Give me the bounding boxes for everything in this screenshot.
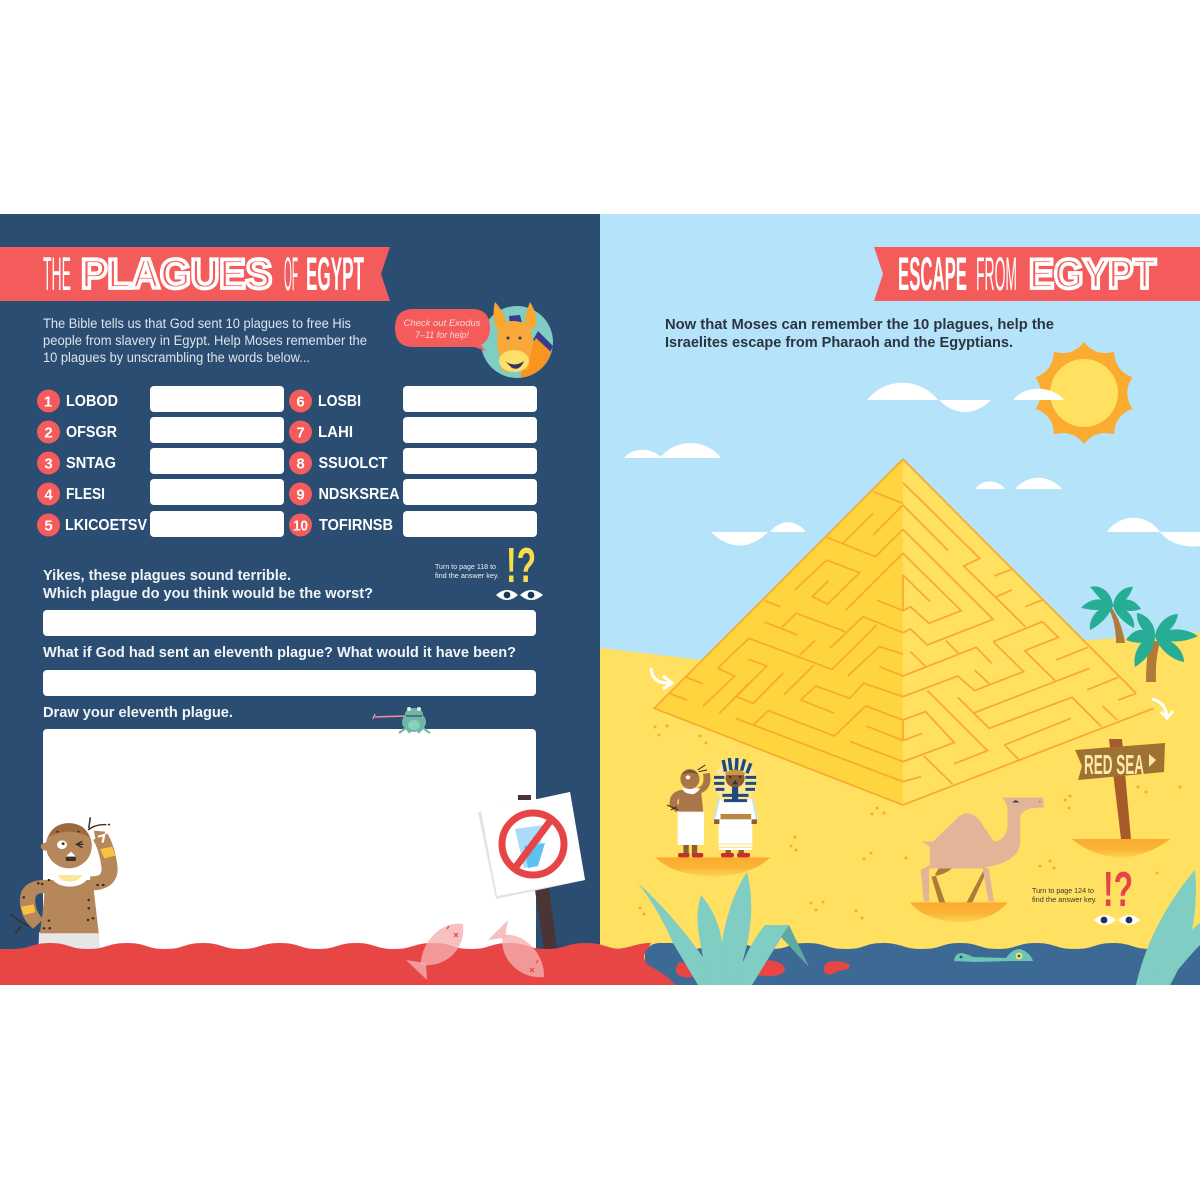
- answer key note with eyes: [1032, 863, 1140, 925]
- word scramble rows: SNTAG: [66, 455, 116, 472]
- blood red river: [0, 943, 624, 985]
- panel: escape from Egypt maze: [600, 247, 1200, 985]
- intro text: 10 plagues by unscrambling the words below...: [43, 350, 310, 365]
- word scramble rows: LAHI: [318, 424, 353, 441]
- clouds: [624, 383, 1200, 546]
- intro text: people from slavery in Egypt. Help Moses remember the: [43, 333, 367, 348]
- word scramble rows: 2: [44, 424, 53, 442]
- question: eleventh plague: [43, 644, 536, 696]
- question: eleventh plague: What if God had sent an eleventh plague? What would it have been?: [43, 644, 516, 661]
- word scramble rows: SSUOLCT: [318, 455, 388, 472]
- answer key note with eyes: !?: [1103, 863, 1133, 917]
- blood water blobs: [600, 943, 850, 985]
- Red Sea water: [645, 943, 1200, 985]
- illustration: man and pharaoh: [655, 757, 770, 877]
- word scramble rows: 9: [296, 486, 305, 504]
- drawing prompt: Draw your eleventh plague.: [43, 704, 233, 721]
- title banner: the plagues of Egypt: THE: [43, 247, 71, 300]
- callout: check out Exodus: Check out Exodus: [404, 318, 481, 329]
- illustration: camel: [910, 798, 1044, 923]
- word scramble rows: 4: [44, 486, 53, 504]
- icon: frog with tongue: [373, 707, 430, 733]
- title banner: escape from Egypt: EGYPT: [1029, 250, 1156, 297]
- arrow: maze exit: [1152, 699, 1173, 718]
- title banner: the plagues of Egypt: PLAGUES: [81, 250, 272, 297]
- sign: no drinking water: [478, 792, 585, 950]
- word scramble rows: 5: [44, 518, 53, 534]
- intro text: Israelites escape from Pharaoh and the Egyptians.: [665, 334, 1013, 351]
- title banner: the plagues of Egypt: EGYPT: [306, 247, 364, 300]
- fish: dead fish two: [488, 920, 544, 977]
- intro text: The Bible tells us that God sent 10 plagues to free His: [43, 316, 351, 331]
- fish: dead fish one: [406, 924, 463, 980]
- word scramble rows: 1: [44, 394, 52, 410]
- intro text: Now that Moses can remember the 10 plagues, help the: [665, 316, 1054, 333]
- question: worst plague: [43, 567, 536, 636]
- title banner: the plagues of Egypt: [0, 247, 390, 301]
- question: worst plague: Yikes, these plagues sound terrible.: [43, 567, 291, 584]
- plant: right agave: [1136, 870, 1200, 985]
- intro text: [43, 316, 367, 365]
- signpost: Red Sea: [1072, 739, 1170, 858]
- panel: left page background: [0, 214, 600, 985]
- palm trees: [1081, 586, 1198, 682]
- answer key note with eyes: find the answer key.: [1032, 897, 1097, 904]
- illustration: man with boils: [10, 817, 116, 952]
- callout: check out Exodus: 7–11 for help!: [415, 330, 469, 341]
- word scramble rows: LOBOD: [66, 393, 118, 410]
- word scramble rows: LKICOETSV: [65, 517, 148, 534]
- arrow: maze start: [651, 668, 672, 689]
- drawing box: [43, 729, 536, 954]
- title banner: escape from Egypt: ESCAPE: [898, 247, 967, 300]
- word scramble rows: TOFIRNSB: [319, 517, 393, 534]
- word scramble rows: 6: [296, 394, 305, 410]
- callout: check out Exodus: [395, 309, 490, 351]
- answer key note with eyes: find the answer key.: [435, 573, 499, 580]
- title banner: the plagues of Egypt: OF: [284, 247, 298, 300]
- answer key note with eyes: Turn to page 118 to: [435, 564, 496, 571]
- icon: crocodile: [954, 949, 1033, 962]
- panel: plagues of Egypt activity: [0, 247, 624, 985]
- icon: donkey in circle: [481, 302, 553, 378]
- word scramble rows: 8: [296, 456, 305, 472]
- word scramble rows: [37, 386, 537, 537]
- icon: sun: [1036, 342, 1132, 444]
- sand speckles: [638, 724, 1182, 920]
- word scramble rows: FLESI: [66, 486, 105, 503]
- title banner: escape from Egypt: [874, 247, 1200, 301]
- word scramble rows: 7: [296, 424, 305, 442]
- answer key note with eyes: Turn to page 124 to: [1032, 888, 1094, 895]
- intro text: [665, 316, 1054, 351]
- panel: right page background: [600, 214, 1200, 985]
- word scramble rows: LOSBI: [318, 393, 361, 410]
- answer key note with eyes: [435, 539, 543, 600]
- word scramble rows: 10: [293, 518, 308, 534]
- word scramble rows: NDSKSREA: [318, 486, 400, 503]
- question: worst plague: Which plague do you think would be the worst?: [43, 585, 373, 602]
- pyramid maze: [654, 459, 1154, 805]
- page number: 35: [1157, 951, 1169, 962]
- title banner: escape from Egypt: FROM: [976, 247, 1017, 300]
- word scramble rows: 3: [44, 456, 53, 472]
- plant: left agave: [638, 872, 809, 985]
- word scramble rows: OFSGR: [66, 424, 117, 441]
- answer key note with eyes: !?: [506, 539, 536, 593]
